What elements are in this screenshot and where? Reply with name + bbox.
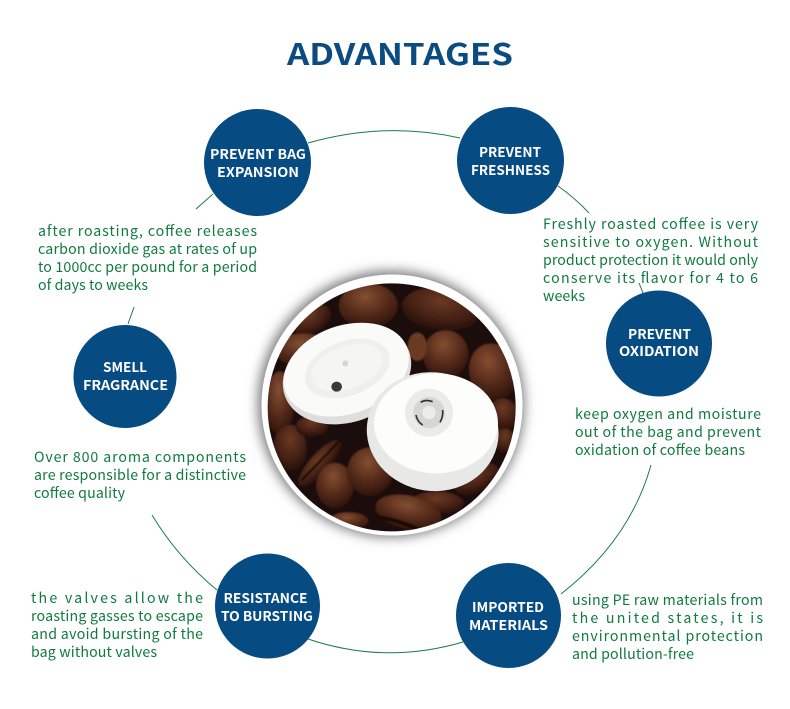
text: fragrance description bbox=[34, 447, 246, 503]
text: oxidation description: out of the bag and prevent bbox=[575, 422, 762, 442]
title: ADVANTAGES bbox=[286, 32, 513, 74]
text: materials description: the united states, it is bbox=[572, 608, 763, 628]
text: fragrance description: coffee quality bbox=[34, 483, 126, 503]
text: freshness description: weeks bbox=[543, 286, 585, 306]
badge: resistance to bursting: TO BURSTING bbox=[221, 605, 313, 625]
badge: prevent oxidation: OXIDATION bbox=[619, 340, 699, 360]
text: materials description: using PE raw materials from bbox=[572, 590, 763, 610]
badge: imported materials: IMPORTED bbox=[472, 596, 544, 616]
badge: prevent freshness: PREVENT bbox=[479, 141, 541, 161]
text: freshness description: Freshly roasted coffee is very bbox=[543, 214, 759, 234]
text: bag expansion description: to 1000cc per pound for a period bbox=[38, 257, 257, 277]
text: bag expansion description bbox=[38, 221, 257, 295]
badge: imported materials bbox=[456, 563, 561, 668]
badge: prevent bag expansion: EXPANSION bbox=[217, 161, 299, 181]
text: freshness description: sensitive to oxygen. Without bbox=[543, 232, 759, 252]
text: bursting description: and avoid bursting of the bbox=[31, 624, 203, 644]
text: freshness description: product protection it would only bbox=[543, 250, 759, 270]
badge: prevent freshness bbox=[457, 107, 564, 214]
text: freshness description bbox=[543, 214, 759, 306]
text: bursting description: the valves allow the bbox=[31, 588, 203, 608]
text: bursting description: bag without valves bbox=[31, 642, 157, 662]
text: bag expansion description: after roasting, coffee releases bbox=[38, 221, 257, 241]
badge: resistance to bursting: RESISTANCE bbox=[224, 587, 308, 607]
central photo: coffee beans and valves bbox=[258, 271, 525, 540]
badge: imported materials: MATERIALS bbox=[469, 614, 548, 634]
text: materials description: environmental protection bbox=[572, 626, 763, 646]
badge: prevent oxidation bbox=[606, 290, 712, 396]
text: materials description bbox=[572, 590, 763, 664]
text: materials description: and pollution-free bbox=[572, 644, 694, 664]
badge: smell fragrance: FRAGRANCE bbox=[83, 374, 168, 394]
icon: lower valve bbox=[359, 364, 506, 500]
connecting ring bbox=[128, 131, 651, 653]
text: bag expansion description: of days to weeks bbox=[38, 275, 148, 295]
text: fragrance description: Over 800 aroma components bbox=[34, 447, 246, 467]
badge: smell fragrance bbox=[74, 325, 176, 428]
text: bursting description bbox=[31, 588, 203, 662]
badge: prevent freshness: FRESHNESS bbox=[471, 159, 550, 179]
badge: prevent bag expansion bbox=[204, 109, 311, 216]
text: freshness description: conserve its flavor for 4 to 6 bbox=[543, 268, 758, 288]
badge: prevent bag expansion: PREVENT BAG bbox=[210, 143, 306, 163]
text: bag expansion description: carbon dioxide gas at rates of up bbox=[38, 239, 257, 259]
text: oxidation description: oxidation of coffee beans bbox=[575, 440, 745, 460]
text: fragrance description: are responsible for a distinctive bbox=[34, 465, 246, 485]
badge: resistance to bursting bbox=[215, 554, 320, 658]
badge: prevent oxidation: PREVENT bbox=[628, 323, 692, 343]
icon: upper valve bbox=[268, 306, 426, 442]
text: bursting description: roasting gasses to escape bbox=[31, 606, 203, 626]
text: oxidation description: keep oxygen and moisture bbox=[575, 404, 761, 424]
text: oxidation description bbox=[575, 404, 762, 460]
badge: smell fragrance: SMELL bbox=[103, 356, 147, 376]
